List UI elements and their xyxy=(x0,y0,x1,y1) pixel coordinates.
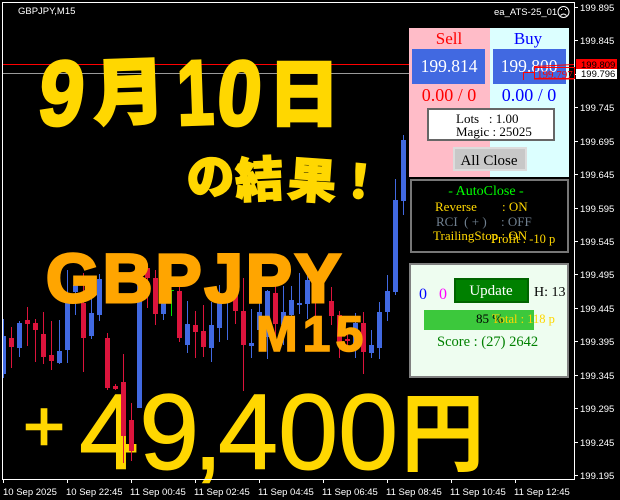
price axis labels: 199.445 xyxy=(580,304,614,315)
headline: date: 日 xyxy=(268,36,340,141)
buy position: 0.00 / 0 xyxy=(502,85,556,105)
price axis labels: 199.895 xyxy=(580,3,614,14)
headline: date xyxy=(34,33,340,145)
rci setting: RCI ( + ) xyxy=(436,214,487,229)
score text: Score : (27) 2642 xyxy=(437,334,538,350)
lots and magic box xyxy=(428,109,554,140)
lots and magic box: Magic : 25025 xyxy=(456,124,532,139)
headline: result: 結 xyxy=(233,140,285,212)
time axis labels: 10 Sep 2025 xyxy=(3,487,57,498)
headline: profit amount: 400 xyxy=(218,371,398,492)
time axis labels xyxy=(3,487,570,498)
time axis labels: 11 Sep 12:45 xyxy=(514,487,570,498)
sell position: 0.00 / 0 xyxy=(422,85,476,105)
all close button: All Close xyxy=(460,153,518,169)
price axis labels: 199.645 xyxy=(580,170,614,181)
update button: Update xyxy=(469,283,513,299)
current price marker: 199.797 xyxy=(537,69,573,81)
time axis labels: 11 Sep 10:45 xyxy=(450,487,506,498)
horizontal price lines xyxy=(3,64,409,74)
price axis labels: 199.245 xyxy=(580,438,614,449)
blue counter: 0 xyxy=(419,286,427,303)
headline: date: 0 xyxy=(213,43,266,145)
headline: date: 9 xyxy=(34,42,90,145)
bid price tag: 199.809 xyxy=(581,60,615,71)
headline: profit amount: , xyxy=(193,371,223,492)
sell price button xyxy=(412,49,485,84)
panel: order panel xyxy=(409,28,569,177)
left margin mask xyxy=(0,0,3,500)
headline: date: 1 xyxy=(175,40,216,144)
trailing stop setting: TrailingStop : ON xyxy=(433,228,528,243)
price axis labels: 199.695 xyxy=(580,137,614,148)
buy label: Buy xyxy=(514,29,543,48)
headline: profit amount: 円 xyxy=(401,364,485,489)
total value: Total : 118 p xyxy=(492,312,555,326)
price axis labels: 199.195 xyxy=(580,471,614,482)
panel: score xyxy=(410,264,568,377)
update button xyxy=(455,279,528,302)
progress percent: 85 % xyxy=(476,311,503,326)
headline: result: の xyxy=(183,136,237,210)
price axis labels: 199.295 xyxy=(580,404,614,415)
progress bar xyxy=(424,310,534,330)
hour counter: H: 13 xyxy=(534,285,566,300)
headline: profit amount: 49 xyxy=(79,371,199,492)
price axis labels: 199.595 xyxy=(580,204,614,215)
price axis labels: 199.845 xyxy=(580,36,614,47)
icon: frown face xyxy=(558,6,569,18)
time axis labels: 11 Sep 04:45 xyxy=(258,487,314,498)
price axis labels xyxy=(580,3,614,482)
panel heading: - AutoClose - xyxy=(448,184,524,199)
current price marker xyxy=(524,64,574,81)
all close button xyxy=(454,148,526,170)
headline: result xyxy=(183,136,385,214)
headline: currency pair: GBPJPY xyxy=(46,240,344,317)
time axis labels: 11 Sep 02:45 xyxy=(194,487,250,498)
magenta counter: 0 xyxy=(439,286,447,303)
headline: profit amount: + xyxy=(23,387,65,467)
price axis labels: 199.545 xyxy=(580,237,614,248)
time axis labels: 11 Sep 08:45 xyxy=(386,487,442,498)
price axis labels: 199.345 xyxy=(580,371,614,382)
headline: result: ！ xyxy=(334,144,385,214)
EA name label: ea_ATS-25_01 xyxy=(494,7,557,18)
lots and magic box: Lots : 1.00 xyxy=(456,111,518,126)
price axis labels: 199.495 xyxy=(580,270,614,281)
time axis labels: 10 Sep 22:45 xyxy=(66,487,123,498)
price axis labels: 199.745 xyxy=(580,103,614,114)
headline: result: 果 xyxy=(286,140,339,213)
headline: timeframe: M15 xyxy=(256,306,368,362)
headline: date: 月 xyxy=(91,33,167,140)
candlestick chart xyxy=(4,135,404,463)
reverse setting: Reverse xyxy=(435,199,477,214)
time axis labels: 11 Sep 06:45 xyxy=(322,487,378,498)
buy price button xyxy=(493,49,566,84)
ask price tag: 199.796 xyxy=(581,69,615,80)
buy price button: 199.800 xyxy=(501,56,558,76)
sell price button: 199.814 xyxy=(421,56,478,76)
symbol label: GBPJPY,M15 xyxy=(18,6,75,17)
profit value: Profit : -10 p xyxy=(491,232,555,246)
headline: profit amount xyxy=(23,364,485,492)
time axis labels: 11 Sep 00:45 xyxy=(130,487,186,498)
reverse value: : ON xyxy=(502,199,528,214)
price axis labels: 199.395 xyxy=(580,337,614,348)
sell label: Sell xyxy=(436,29,462,48)
rci value: : OFF xyxy=(501,214,532,229)
panel: auto close settings xyxy=(411,180,568,252)
